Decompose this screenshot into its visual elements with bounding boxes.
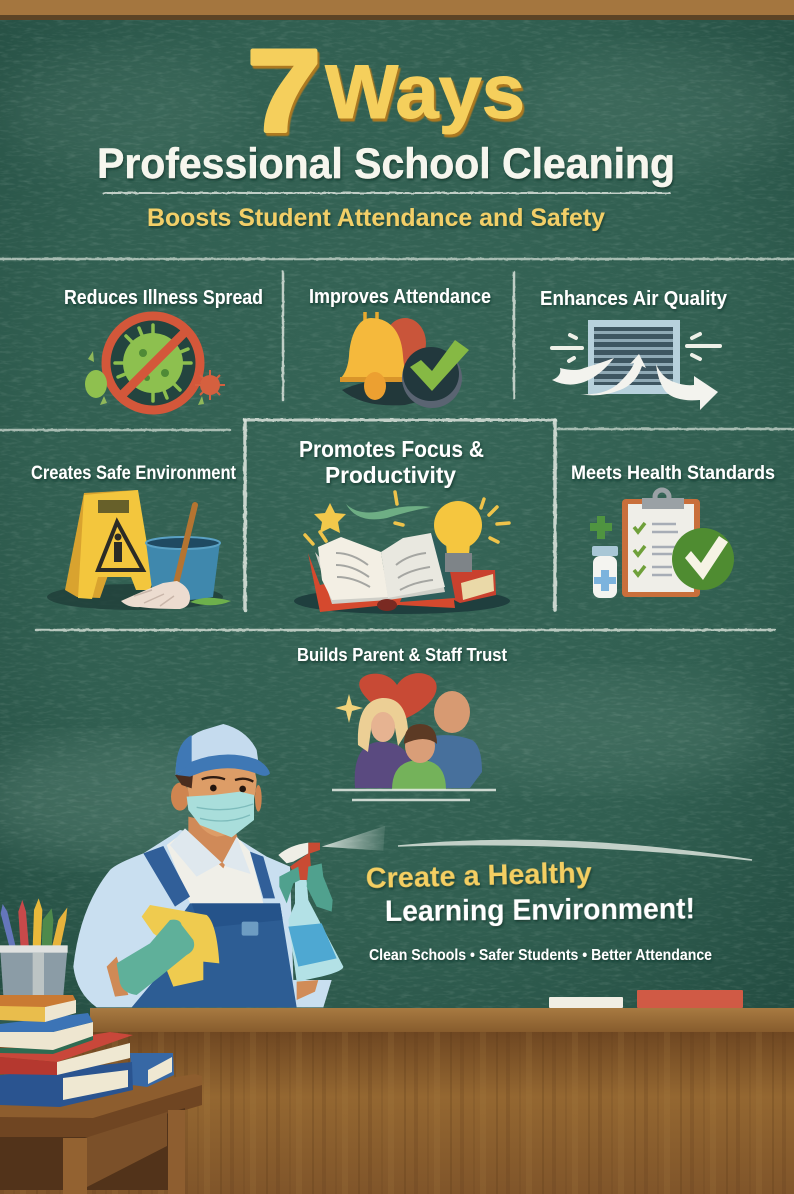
icon: air vent with arrows <box>552 320 720 410</box>
head <box>187 763 257 837</box>
panel: meets health standards <box>571 463 775 598</box>
panel: builds parent and staff trust <box>297 645 507 800</box>
right glove <box>279 863 333 912</box>
panel: reduces illness spread <box>64 287 263 410</box>
erasers on ledge <box>549 990 743 1008</box>
title <box>97 25 675 232</box>
panel: creates safe environment <box>31 463 237 610</box>
heading: Enhances Air Quality <box>540 288 728 310</box>
panel: enhances air quality <box>540 288 728 410</box>
panel: promotes focus and productivity <box>294 436 510 614</box>
yellow cloth <box>142 905 219 987</box>
top wooden frame <box>0 0 794 20</box>
spray bottle <box>278 843 343 982</box>
left glove <box>117 920 194 995</box>
chalk swoosh <box>398 840 752 860</box>
title numeral and word: 7 <box>247 25 321 156</box>
icon: wet floor sign, bucket and mop <box>47 490 231 610</box>
right forearm <box>297 980 318 1000</box>
title second line: Professional School Cleaning <box>97 140 675 188</box>
chalk grid lines <box>0 193 794 630</box>
shirt front and collar <box>167 830 263 903</box>
heading: Meets Health Standards <box>571 463 775 484</box>
bib band and pocket <box>192 903 283 928</box>
icon: virus crossed out <box>85 316 225 410</box>
heading: Improves Attendance <box>309 286 491 308</box>
left cuff <box>107 957 128 997</box>
overall straps <box>143 846 275 907</box>
wooden wall and ledge <box>0 1008 794 1194</box>
shirt <box>73 830 332 1007</box>
subtitle: Boosts Student Attendance and Safety <box>147 204 605 232</box>
heading: Productivity <box>325 462 456 488</box>
heading <box>299 436 484 488</box>
icon: bell and check <box>340 312 469 408</box>
face mask <box>187 792 254 837</box>
icon: family with heart <box>332 673 496 800</box>
neck <box>188 817 237 868</box>
wooden side table <box>0 1074 202 1194</box>
red book <box>0 1032 133 1062</box>
title numeral and word <box>247 25 525 156</box>
stack of books <box>0 995 174 1107</box>
pencil cup <box>0 898 68 995</box>
blue and green book <box>0 1034 93 1054</box>
collar <box>170 828 251 877</box>
small blue book <box>130 1053 174 1087</box>
title numeral and word: Ways <box>325 50 525 135</box>
large blue book <box>0 1062 133 1107</box>
heading: Creates Safe Environment <box>31 463 237 484</box>
cap <box>176 724 258 775</box>
overalls <box>132 903 297 1007</box>
panel: improves attendance <box>309 286 491 408</box>
heading: Reduces Illness Spread <box>64 287 263 309</box>
heading: Promotes Focus & <box>299 436 484 462</box>
tagline: Clean Schools • Safer Students • Better Attendance <box>369 947 712 964</box>
call to action line one: Create a Healthy <box>365 857 592 895</box>
heading: Builds Parent & Staff Trust <box>297 645 507 665</box>
icon: open book, star and light bulb <box>294 492 510 614</box>
call to action line two: Learning Environment! <box>385 892 695 928</box>
spray mist <box>322 826 385 851</box>
icon: clipboard, vial and check badge <box>590 490 734 598</box>
call to action <box>365 840 752 964</box>
cleaner with spray bottle <box>73 724 385 1007</box>
orange and yellow book <box>0 995 76 1007</box>
